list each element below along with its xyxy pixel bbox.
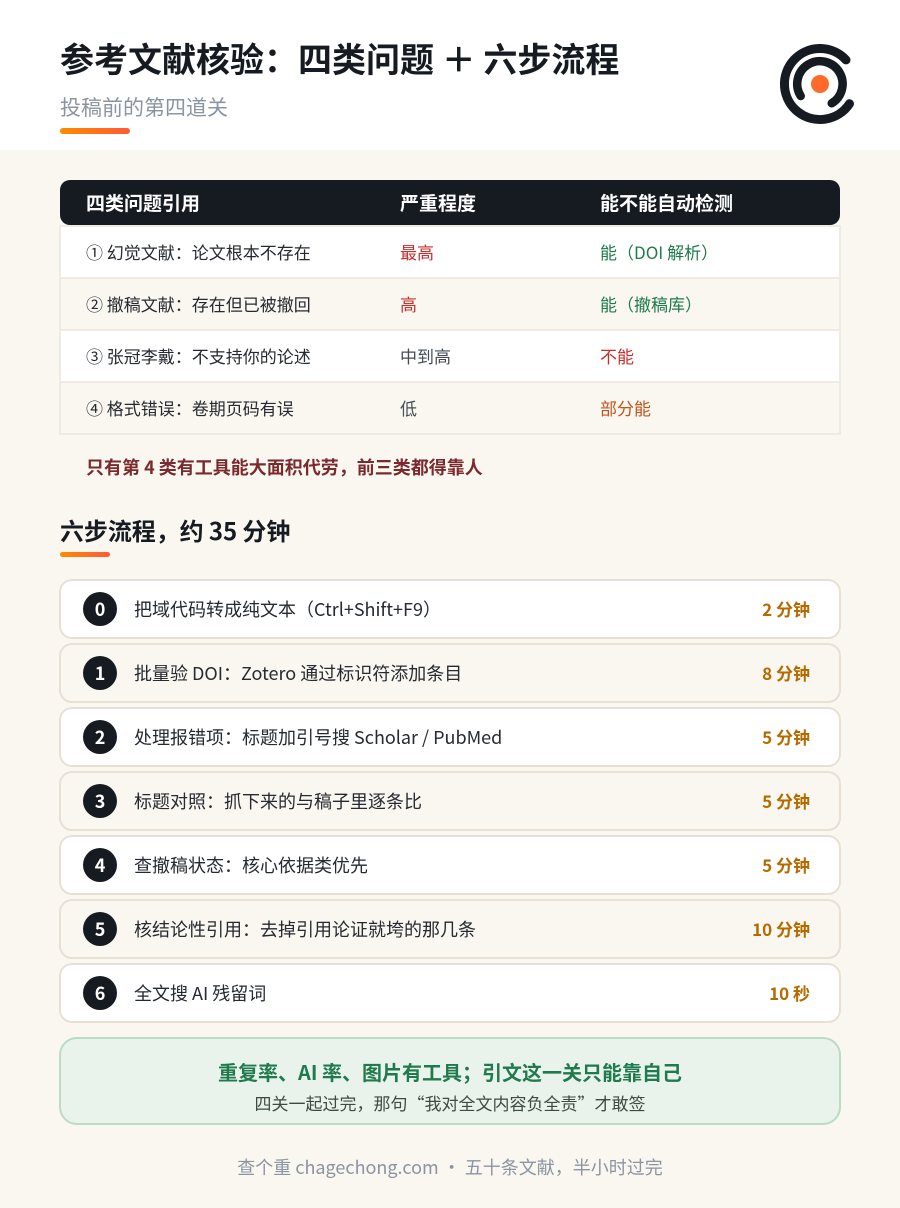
table row 3: 不能 (600, 343, 634, 368)
table row 1: ① 幻觉文献：论文根本不存在 (86, 239, 311, 264)
step 4: 4 (95, 852, 105, 878)
step 5 (59, 899, 841, 959)
table row 2: 高 (400, 291, 417, 316)
step 1: 8 分钟 (762, 660, 810, 685)
table row 2: 能（撤稿库） (600, 291, 702, 316)
title accent bar (60, 128, 130, 134)
callout headline: 重复率、AI 率、图片有工具；引文这一关只能靠自己 (218, 1057, 682, 1086)
table row 3: ③ 张冠李戴：不支持你的论述 (86, 343, 311, 368)
table row 3: 中到高 (400, 343, 451, 368)
table row 4 (59, 383, 841, 435)
step 2: 处理报错项：标题加引号搜 Scholar / PubMed (134, 724, 502, 750)
step 5: 5 (95, 916, 105, 942)
icon: logo (780, 44, 854, 124)
callout (59, 1037, 841, 1125)
step 3: 标题对照：抓下来的与稿子里逐条比 (134, 788, 422, 814)
step 1: 1 (95, 660, 105, 686)
step 0 (59, 579, 841, 639)
step 1: 批量验 DOI：Zotero 通过标识符添加条目 (134, 660, 462, 686)
table header: 严重程度 (400, 189, 476, 216)
step 0: 2 分钟 (762, 596, 810, 621)
section heading: 六步流程，约 35 分钟 (60, 512, 290, 547)
step 6: 全文搜 AI 残留词 (134, 980, 266, 1006)
callout text: 四关一起过完，那句“我对全文内容负全责”才敢签 (254, 1090, 646, 1115)
table row 2: ② 撤稿文献：存在但已被撤回 (86, 291, 311, 316)
table header: 能不能自动检测 (600, 189, 733, 216)
table row 3 (59, 331, 841, 383)
table row 4: 部分能 (600, 395, 651, 420)
table header: 四类问题引用 (86, 189, 200, 216)
table: four problem types (59, 180, 841, 435)
step 6: 6 (95, 980, 105, 1006)
step 4 (59, 835, 841, 895)
step 2: 2 (95, 724, 105, 750)
step 2 (59, 707, 841, 767)
step 3: 3 (95, 788, 105, 814)
step 5: 核结论性引用：去掉引用论证就垮的那几条 (134, 916, 476, 942)
table note: 只有第 4 类有工具能大面积代劳，前三类都得靠人 (86, 454, 483, 480)
header panel (0, 0, 900, 150)
table row 2 (59, 279, 841, 331)
footer: 查个重 chagechong.com ・ 五十条文献，半小时过完 (237, 1154, 663, 1180)
subtitle: 投稿前的第四道关 (60, 92, 228, 122)
step 4: 查撤稿状态：核心依据类优先 (134, 852, 368, 878)
step 6: 10 秒 (769, 980, 810, 1005)
table row 4: 低 (400, 395, 417, 420)
heading accent bar (60, 552, 110, 557)
table row 1 (59, 225, 841, 279)
step 1 (59, 643, 841, 703)
step 3 (59, 771, 841, 831)
step 6 (59, 963, 841, 1023)
step 0: 把域代码转成纯文本（Ctrl+Shift+F9） (134, 596, 441, 622)
table row 1: 最高 (400, 239, 434, 264)
title: 参考文献核验：四类问题 ＋ 六步流程 (60, 33, 619, 82)
step 4: 5 分钟 (762, 852, 810, 877)
table row 1: 能（DOI 解析） (600, 239, 718, 264)
table row 4: ④ 格式错误：卷期页码有误 (86, 395, 294, 420)
step 0: 0 (95, 596, 105, 622)
step 3: 5 分钟 (762, 788, 810, 813)
step 5: 10 分钟 (752, 916, 810, 941)
table header (60, 180, 840, 225)
step 2: 5 分钟 (762, 724, 810, 749)
